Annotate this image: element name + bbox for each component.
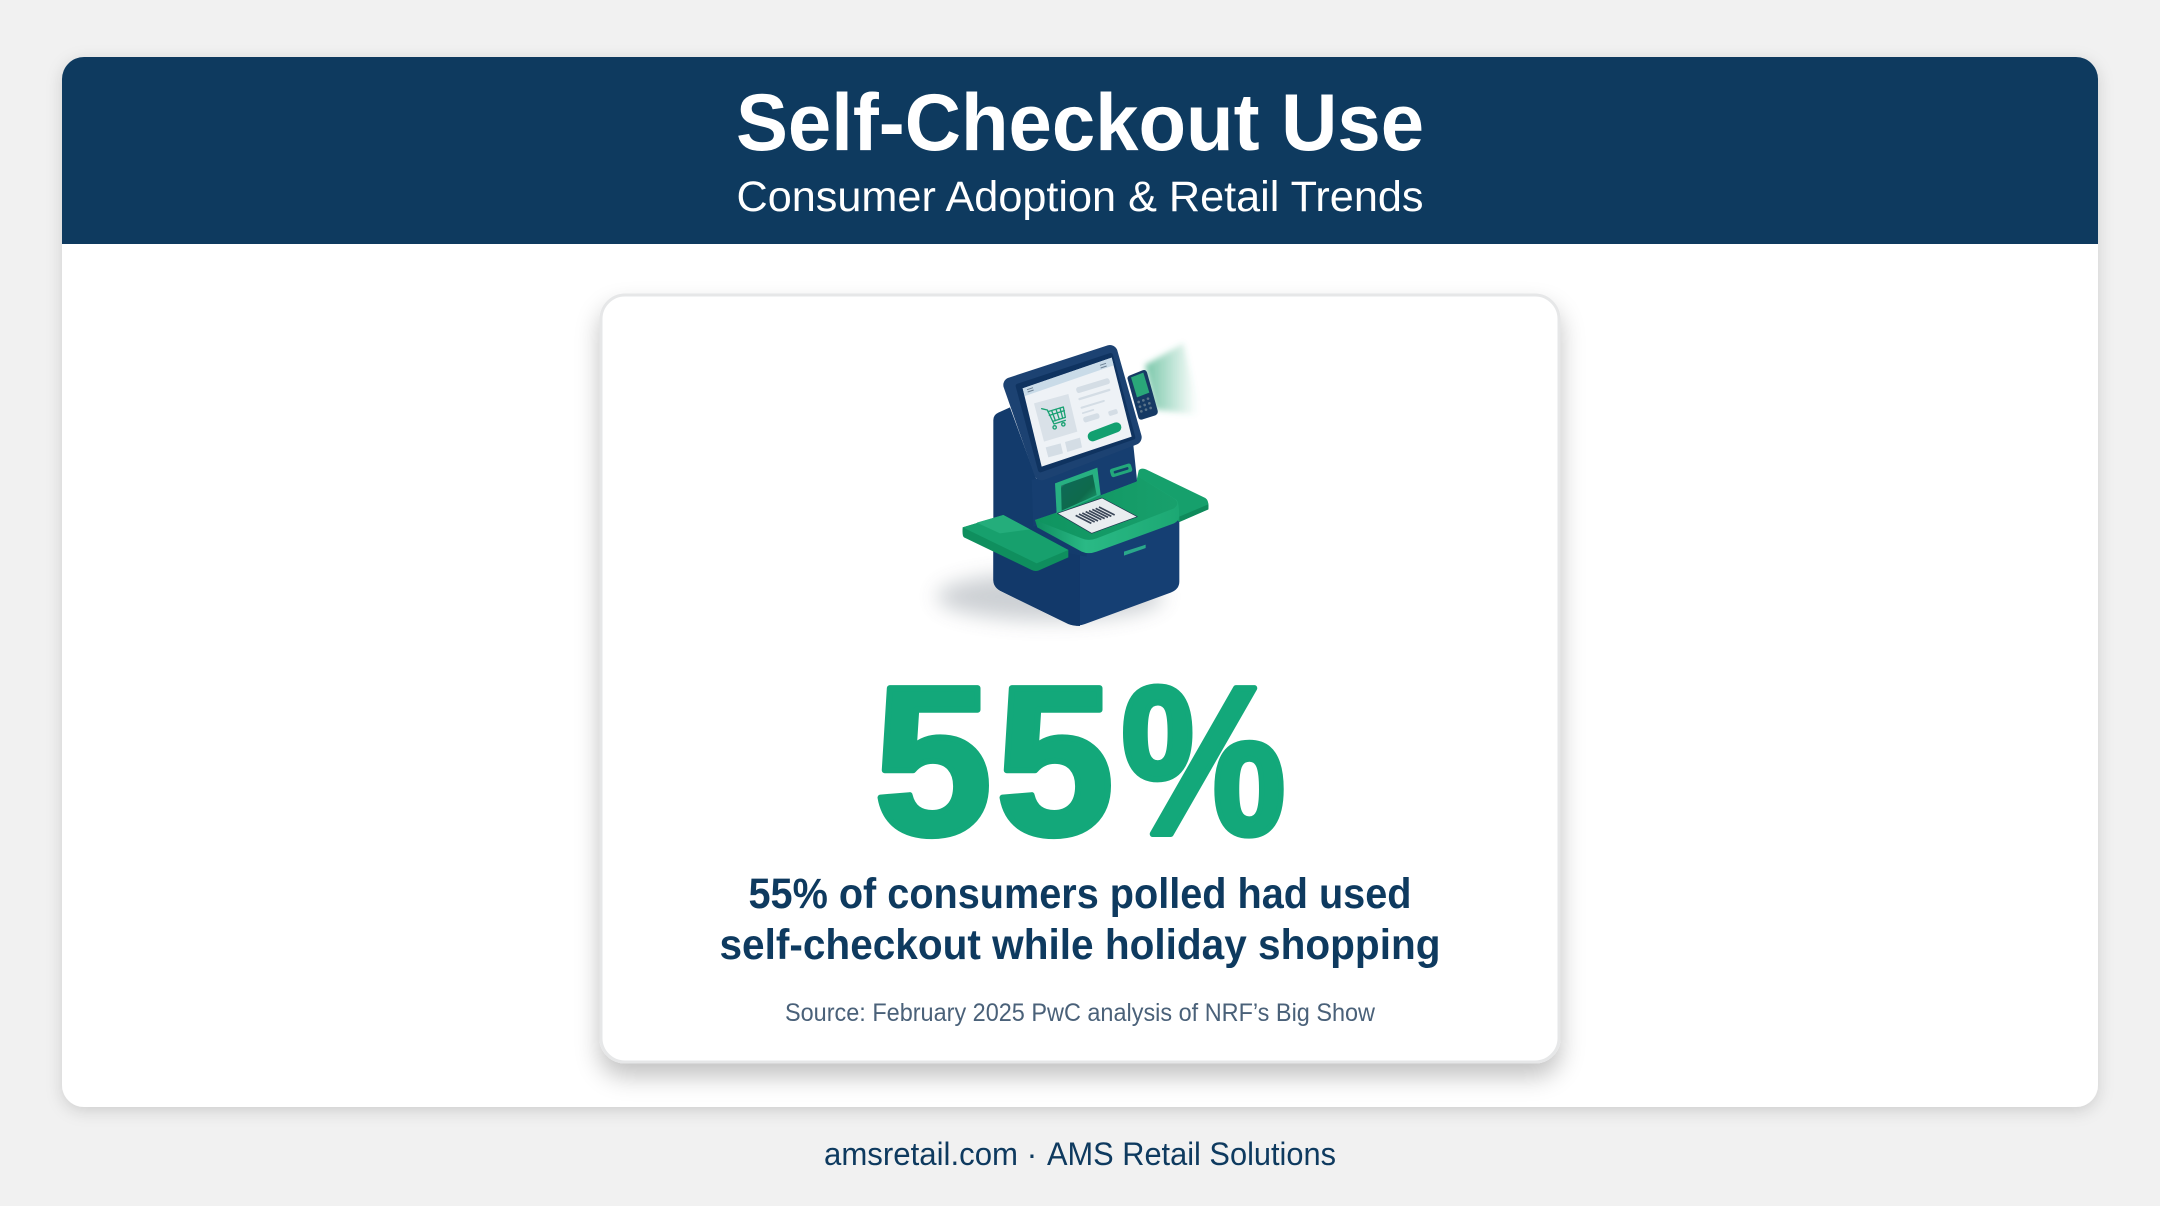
big number: 5 (996, 642, 1114, 879)
checkout button (1093, 427, 1116, 436)
right wing (1137, 469, 1209, 522)
footer (824, 1136, 1336, 1172)
big number (874, 642, 1286, 879)
scan slot (1055, 468, 1101, 514)
screen tiles (1046, 378, 1118, 457)
scanner beam (1145, 343, 1200, 415)
panel: statistic card (601, 295, 1559, 1062)
statistic description: self-checkout while holiday shopping (720, 921, 1440, 969)
footer: AMS Retail Solutions (1047, 1136, 1336, 1172)
big number: 5 (874, 642, 992, 879)
header band (62, 57, 2098, 244)
footer: · (1027, 1136, 1037, 1172)
menu glyphs (1027, 363, 1107, 392)
barcode ticket (1057, 498, 1137, 533)
kiosk neck (1032, 445, 1137, 527)
kiosk base (993, 517, 1179, 626)
footer: amsretail.com (824, 1136, 1018, 1172)
main counter (1035, 477, 1179, 553)
source note: Source: February 2025 PwC analysis of NRF’s Big Show (785, 999, 1376, 1027)
icon: self-checkout kiosk (937, 343, 1209, 626)
touchscreen (1011, 353, 1134, 473)
kiosk ground shadow (937, 573, 1163, 621)
kiosk tower (993, 407, 1087, 557)
title: Self-Checkout Use (736, 78, 1424, 168)
left shelf (962, 515, 1068, 571)
big number: % (1121, 642, 1286, 879)
handheld scanner (1127, 370, 1158, 420)
card slot (1109, 463, 1133, 478)
statistic description (720, 870, 1440, 969)
base slot (1124, 545, 1146, 556)
product tile (1034, 394, 1077, 442)
icon: shopping cart (1042, 407, 1065, 429)
statistic description: 55% of consumers polled had used (748, 870, 1412, 918)
subtitle: Consumer Adoption & Retail Trends (736, 173, 1424, 221)
